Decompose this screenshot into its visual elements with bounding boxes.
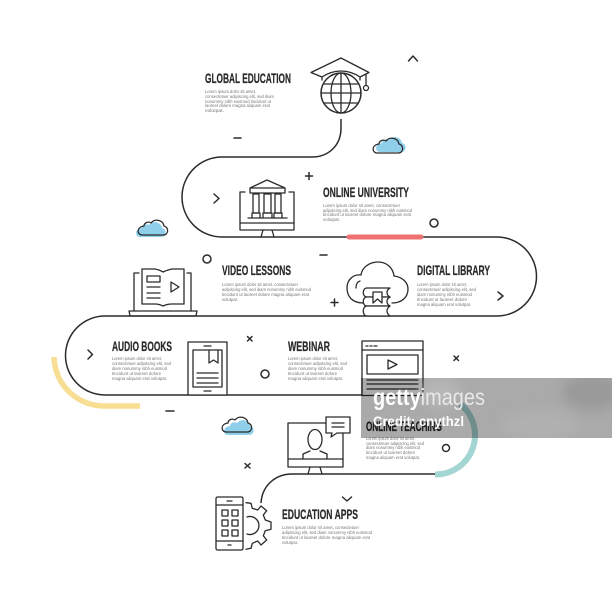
text: online university body: adipiscing elit, sed diam nonummy nibh euismod [323,208,412,213]
watermark band: Credit: cnythzl [373,413,464,429]
text: online university body [323,203,412,222]
heading: webinar: WEBINAR [288,339,330,354]
yellow accent arc [54,357,140,406]
text: global education body: Lorem ipsum dolor sit amet, [205,89,256,94]
text: video lessons body [222,282,311,302]
text: global education body: consectetuer adipiscing elit, sed diam [205,94,274,99]
icon: graduation cap and globe [311,58,369,113]
icon: teacher on monitor [288,417,350,474]
text: audio books body: Lorem ipsum dolor sit amet, [112,356,162,361]
text: education apps body: volutpat. [282,540,298,545]
text: global education body: nonummy nibh euismod tincidunt ut [205,99,272,104]
text: webinar body [288,356,347,381]
text: online teaching body: magna aliquam erat volutpat. [366,455,420,460]
text: online teaching body: diam nonummy nibh euismod [366,445,420,450]
text: audio books body: diam nonummy nibh euismod [112,366,167,371]
watermark band [361,374,612,439]
text: online teaching body [366,436,424,460]
text: online teaching body: consectetuer adipiscing elit, sed [366,441,424,446]
text: digital library body: tincidunt ut laoreet dolore [417,297,467,302]
text: education apps body: Lorem ipsum dolor sit amet, consectetuer [282,525,359,530]
heading: education apps: EDUCATION APPS [282,507,358,522]
icon: video lessons laptop [129,269,197,316]
text: online teaching body: tincidunt ut laoreet dolore [366,450,415,455]
text: audio books body: consectetuer adipiscing elit, sed [112,361,171,366]
text: video lessons body: tincidunt ut laoreet dolore magna aliquam erat [222,292,310,297]
text: online university body: tincidunt ut laoreet dolore magna aliquam erat [323,212,412,217]
text: digital library body: diam nonummy nibh euismod [417,292,472,297]
text: video lessons body: adipiscing elit, sed diam nonummy nibh euismod [222,287,311,292]
icon: e-book tablet [188,342,227,395]
text: webinar body: magna aliquam erat volutpat. [288,376,343,381]
text: audio books body [112,356,171,381]
text: webinar body: tincidunt ut laoreet dolore [288,371,337,376]
winding route line [66,119,536,503]
icon: cloud top right [373,137,406,153]
watermark band: gettyimages [373,384,485,410]
text: video lessons body: volutpat. [222,297,238,302]
text: webinar body: consectetuer adipiscing elit, sed [288,361,347,366]
heading: online university: ONLINE UNIVERSITY [323,185,409,200]
text: education apps body: adipiscing elit, sed diam nonummy nibh euismod [282,530,372,535]
icon: university on monitor [240,180,294,237]
text: digital library body: magna aliquam erat volutpat. [417,302,471,307]
heading: online teaching: ONLINE TEACHING [366,419,442,434]
icon: cloud left [136,220,168,237]
decorative glyphs: chevrons, plus, minus, crosses, rings [88,56,503,501]
text: education apps body [282,525,372,545]
red accent bar [349,234,421,240]
text: education apps body: tincidunt ut laoreet dolore magna aliquam erat [282,535,371,540]
icon: webinar browser window [362,341,423,396]
text: global education body: laoreet dolore magna aliquam erat [205,103,271,108]
teal accent arc [435,404,475,475]
text: digital library body [417,282,476,307]
text: global education body: volutpat. [205,108,224,113]
text: online university body: Lorem ipsum dolor sit amet, consectetuer [323,203,400,208]
text: digital library body: consectetuer adipiscing elit, sed [417,287,476,292]
text: online university body: volutpat. [323,217,340,222]
icon: phone with gear [216,497,271,550]
heading: audio books: AUDIO BOOKS [112,339,172,354]
icon: cloud with books [347,262,408,316]
text: webinar body: diam nonummy nibh euismod [288,366,343,371]
text: webinar body: Lorem ipsum dolor sit amet, [288,356,338,361]
text: audio books body: tincidunt ut laoreet dolore [112,371,161,376]
text: digital library body: Lorem ipsum dolor sit amet, [417,282,467,287]
icon: cloud lower [222,417,254,435]
text: online teaching body: Lorem ipsum dolor sit amet, [366,436,415,441]
heading: global education: GLOBAL EDUCATION [205,71,291,86]
heading: digital library: DIGITAL LIBRARY [417,263,490,278]
heading: video lessons: VIDEO LESSONS [222,263,291,278]
text: global education body [205,89,274,113]
text: video lessons body: Lorem ipsum dolor sit amet, consectetuer [222,282,298,287]
text: audio books body: magna aliquam erat volutpat. [112,376,167,381]
